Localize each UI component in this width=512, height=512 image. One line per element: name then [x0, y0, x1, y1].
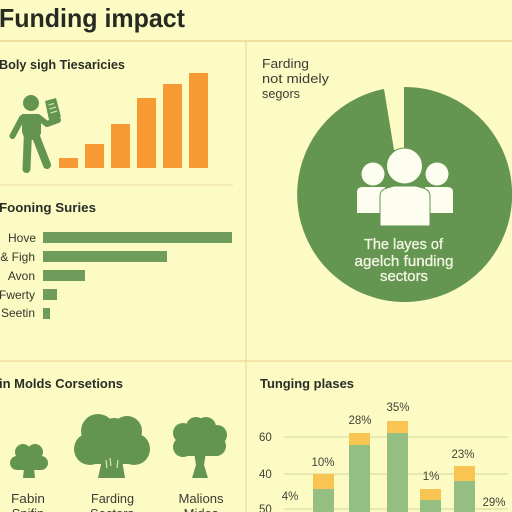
panel: horizontal funding bars	[0, 200, 232, 320]
bar chart: orange bars	[59, 73, 208, 168]
panel: stacked bar chart	[259, 376, 508, 512]
bar labels: & Figh	[0, 250, 35, 264]
icon: small tree	[10, 444, 48, 478]
bar labels: Seetin	[1, 306, 35, 320]
bar labels: Avon	[8, 269, 35, 283]
label: pie caption: not midely	[262, 71, 330, 86]
pie chart with wedge gap	[297, 87, 512, 302]
stacked bars	[313, 421, 475, 512]
bar labels: Fwerty	[0, 288, 35, 302]
label: pie caption: segors	[262, 86, 300, 101]
percentage labels: 10%	[311, 457, 335, 469]
panel: tree icons	[0, 376, 227, 512]
label: pie caption: Farding	[262, 56, 309, 71]
percentage labels: 28%	[348, 415, 372, 427]
panel: growth bars	[0, 58, 208, 169]
heading: funding bars: Fooning Suries	[0, 200, 96, 215]
bar labels	[0, 231, 36, 320]
axis labels: 40	[259, 469, 272, 481]
percentage labels: 35%	[386, 402, 410, 414]
pie centre text: agelch funding	[354, 253, 454, 270]
label: pie caption	[262, 56, 330, 101]
heading: stacked chart: Tunging plases	[260, 376, 354, 391]
panel: sector pie	[262, 56, 512, 302]
pie centre text: sectors	[380, 268, 428, 285]
axis labels: 60	[259, 432, 272, 444]
heading: tree panel: in Molds Corsetions	[0, 376, 123, 391]
pie centre text	[354, 236, 454, 285]
tree labels	[11, 491, 224, 512]
icon: person holding document	[12, 95, 61, 169]
icon: group of people	[357, 148, 453, 226]
tree labels: Fabin	[11, 491, 45, 506]
tree labels: Malions	[178, 491, 224, 506]
percentage labels: 23%	[451, 449, 475, 461]
axis labels	[259, 432, 272, 512]
percentage labels: 1%	[423, 471, 439, 483]
heading: growth bars: Boly sigh Tiesaricies	[0, 58, 125, 72]
horizontal bar chart	[43, 232, 232, 319]
title: Funding impact	[0, 3, 185, 33]
icon: large tree	[74, 414, 150, 478]
highlights: large tree trunk	[106, 458, 118, 468]
pie centre text: The layes of	[364, 236, 444, 253]
percentage labels: 4%	[282, 491, 298, 503]
bar labels: Hove	[8, 231, 36, 245]
tree labels: Farding	[91, 491, 134, 506]
percentage labels	[282, 402, 506, 509]
icon: medium tree	[173, 417, 227, 478]
percentage labels: 29%	[482, 497, 506, 509]
